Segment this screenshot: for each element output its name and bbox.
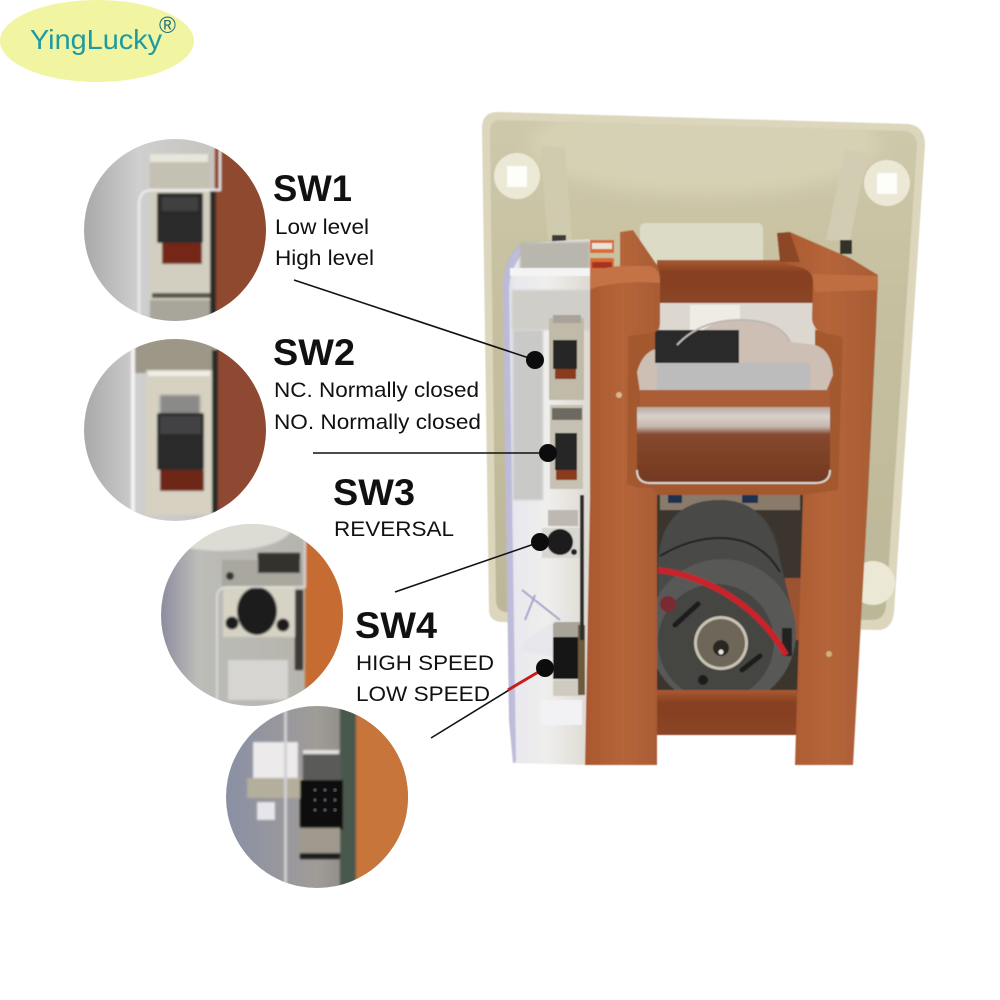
label: SW2: NO. Normally closed: [274, 411, 481, 434]
label: SW3: [333, 472, 454, 541]
red motor wire: [658, 570, 786, 655]
bottom brown bar: [655, 690, 797, 735]
circle detail: SW1 switch: [84, 135, 270, 325]
mounting hole: top right: [864, 160, 910, 206]
leader line: SW4: [431, 659, 554, 738]
mounting hole: lower right: [851, 561, 895, 605]
motor: [648, 500, 796, 707]
circle detail: SW4 toggle switch: [226, 700, 411, 895]
label: SW2: NC. Normally closed: [274, 379, 479, 402]
label: SW4: SW4: [355, 605, 437, 646]
label: SW2: [273, 332, 481, 434]
label: SW1: Low level: [275, 216, 369, 239]
label: SW1: [273, 168, 374, 270]
label: SW2: SW2: [273, 332, 355, 373]
SW4 toggle switch: [553, 622, 585, 696]
logo: YingLucky: [0, 0, 194, 82]
label: SW4: [355, 605, 494, 706]
brown frame: right upright: [777, 232, 878, 765]
spots on frame: [616, 392, 622, 398]
SW3 push button: [542, 510, 583, 558]
logo: YingLucky: YingLucky: [30, 24, 162, 55]
top roller bar: [657, 260, 813, 303]
leader line: SW2: [313, 444, 557, 462]
mounting hole: top left: [494, 153, 540, 199]
label: SW4: HIGH SPEED: [356, 652, 494, 675]
roller: [637, 407, 830, 483]
label: SW3: REVERSAL: [334, 518, 454, 541]
dark motor chamber: [650, 480, 810, 695]
circle detail: SW3 button: [161, 524, 343, 706]
SW1 switch body: [549, 315, 584, 400]
brown frame: upper window: [627, 260, 845, 495]
label: SW4: LOW SPEED: [356, 683, 490, 706]
main product: coin hopper device: [482, 95, 925, 765]
brown frame: left upright: [585, 230, 660, 765]
label: SW3: SW3: [333, 472, 415, 513]
leader line: SW1: [294, 280, 544, 369]
black connector: [655, 330, 739, 363]
clear flap: [637, 320, 833, 392]
label: SW1: High level: [275, 247, 374, 270]
transparent circuit case: [503, 239, 614, 765]
back mounting plate: [482, 95, 925, 630]
label: SW1: SW1: [273, 168, 352, 209]
circle detail: SW2 switch: [84, 335, 272, 525]
logo: YingLucky: ®: [159, 12, 176, 38]
SW2 switch body: [550, 405, 583, 489]
leader line: SW3: [395, 533, 549, 592]
